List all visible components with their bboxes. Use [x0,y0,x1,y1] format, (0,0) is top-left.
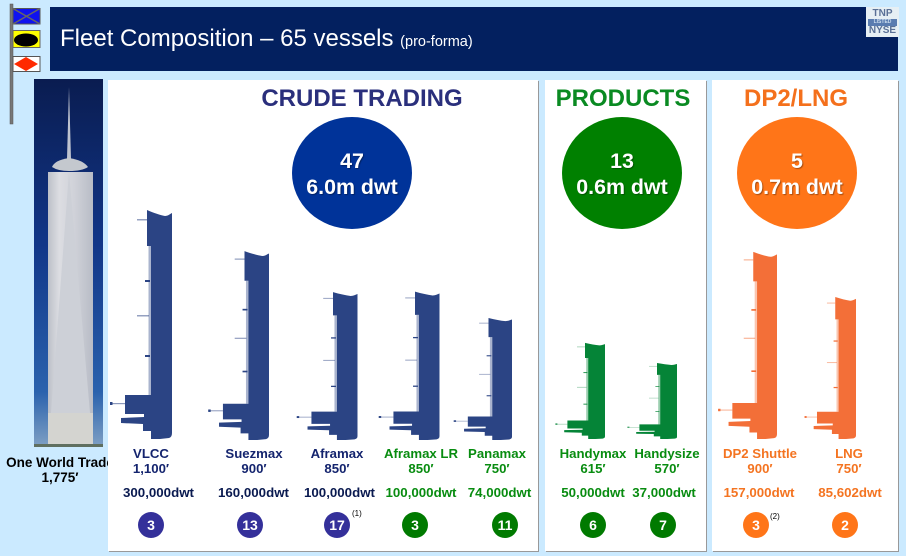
circle: crude total: 47 [340,149,364,173]
circle: DP2/LNG total: 0.7m dwt [751,175,843,199]
ship: Aframax LR [379,292,440,440]
tower caption: 1,775′ [41,470,79,485]
label: LNG [835,446,863,476]
panel: crude trading [108,80,538,551]
circle: crude total: 6.0m dwt [306,175,398,199]
dwt: VLCC: 300,000dwt [123,485,194,500]
circle: products total: 13 [610,149,634,173]
dwt: Handymax: 50,000dwt [561,485,625,500]
flagpole with signal flags [10,4,40,124]
title: Fleet Composition – 65 vessels (pro-forma) [60,25,473,52]
count: Suezmax: 13 [242,517,258,533]
count: Aframax [324,512,350,538]
count: Aframax LR [402,512,428,538]
label: DP2 Shuttle [723,446,797,476]
dwt: Handysize: 37,000dwt [632,485,696,500]
panel: DP2/LNG [712,80,898,551]
dwt: Suezmax: 160,000dwt [218,485,289,500]
circle: DP2/LNG total: 5 [791,149,803,173]
label: Panamax: Panamax [468,446,526,461]
circle: products total [562,117,682,229]
label: Aframax [311,446,364,476]
dwt: Panamax: 74,000dwt [468,485,531,500]
label: Suezmax: 900′ [241,461,267,476]
label: Panamax: 750′ [484,461,510,476]
dwt: Aframax: 100,000dwt [304,485,375,500]
count: VLCC: 3 [147,517,155,533]
tower caption: One World Trade [6,455,114,470]
label: LNG: LNG [835,446,863,461]
tower caption [6,455,114,485]
label: Handysize: Handysize [634,446,700,461]
label: Aframax: Aframax [311,446,363,461]
label: VLCC [133,446,169,476]
ship: LNG [805,297,856,439]
ship: DP2 Shuttle [718,252,777,439]
count: Panamax: 11 [498,517,512,533]
logo: TNP NYSE: TNP NYSE [869,8,896,36]
label: Handymax [560,446,626,476]
label: Suezmax [225,446,283,476]
footnote 1: (1) [352,509,362,518]
label: Handysize [634,446,700,476]
count: DP2 Shuttle [743,512,769,538]
label: Panamax [468,446,526,476]
footnote 2: (2) [770,512,780,521]
ship: Suezmax [208,251,269,440]
circle: products total: 0.6m dwt [576,175,668,199]
logo: TNP NYSE: LISTED [874,19,891,25]
count: Aframax LR: 3 [411,517,419,533]
label: Handymax: 615′ [580,461,606,476]
count: Panamax [492,512,518,538]
label: Aframax LR [384,446,458,476]
dwt: DP2 Shuttle: 157,000dwt [724,485,794,500]
label: VLCC: 1,100′ [133,461,169,476]
label: Aframax LR: 850′ [408,461,434,476]
heading: products: PRODUCTS [556,85,690,112]
count: VLCC [138,512,164,538]
heading: crude trading: CRUDE TRADING [261,85,463,112]
count: LNG: 2 [841,517,849,533]
ship: Aframax [297,292,358,440]
panel: products [545,80,706,551]
label: Suezmax: Suezmax [225,446,283,461]
label: Handymax: Handymax [560,446,626,461]
count: Handymax [580,512,606,538]
circle: DP2/LNG total [737,117,857,229]
circle: crude total [292,117,412,229]
ship: Panamax [454,318,512,440]
count: DP2 Shuttle: 3 [752,517,760,533]
label: VLCC: VLCC [133,446,169,461]
count: Aframax: 17 [329,517,345,533]
ship: Handysize [627,363,677,439]
count: Suezmax [237,512,263,538]
label: LNG: 750′ [836,461,862,476]
header banner [50,7,898,71]
count: LNG [832,512,858,538]
ship: Handymax [555,343,605,439]
photo: One World Trade tower [34,79,103,447]
ship: VLCC [110,210,172,439]
heading: DP2/LNG: DP2/LNG [744,85,848,112]
count: Handysize: 7 [659,517,667,533]
count: Handysize [650,512,676,538]
count: Handymax: 6 [589,517,597,533]
dwt: Aframax LR: 100,000dwt [386,485,456,500]
label: Aframax LR: Aframax LR [384,446,458,461]
label: Handysize: 570′ [654,461,680,476]
dwt: LNG: 85,602dwt [818,485,882,500]
label: Aframax: 850′ [324,461,350,476]
label: DP2 Shuttle: DP2 Shuttle [723,446,797,461]
label: DP2 Shuttle: 900′ [747,461,773,476]
